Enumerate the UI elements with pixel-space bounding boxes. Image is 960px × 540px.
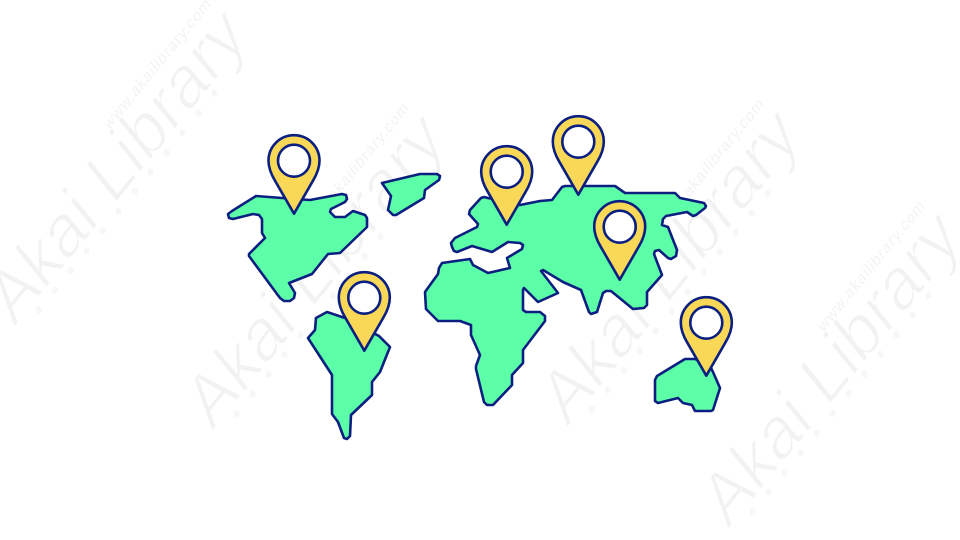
pin: Europe — [481, 146, 532, 225]
continent: South America — [308, 312, 390, 439]
continent: Eurasia and Africa — [425, 186, 706, 405]
watermark 2: www.akailibrary.com — [299, 99, 412, 238]
world map — [228, 174, 720, 439]
pin: North America — [268, 135, 320, 214]
watermark 2: Akai Library — [172, 93, 457, 444]
pin: South America — [339, 272, 390, 351]
watermark 4: www.akailibrary.com — [815, 197, 928, 336]
continent: Australia — [655, 359, 720, 411]
continent: North America — [228, 194, 367, 301]
pin: Northern Asia — [553, 116, 604, 195]
watermark 3: Akai Library — [527, 89, 812, 440]
continent: Greenland — [382, 174, 440, 215]
pin: Central Asia — [594, 201, 645, 280]
watermark 3: www.akailibrary.com — [654, 95, 767, 234]
pin: Australia — [681, 297, 732, 376]
